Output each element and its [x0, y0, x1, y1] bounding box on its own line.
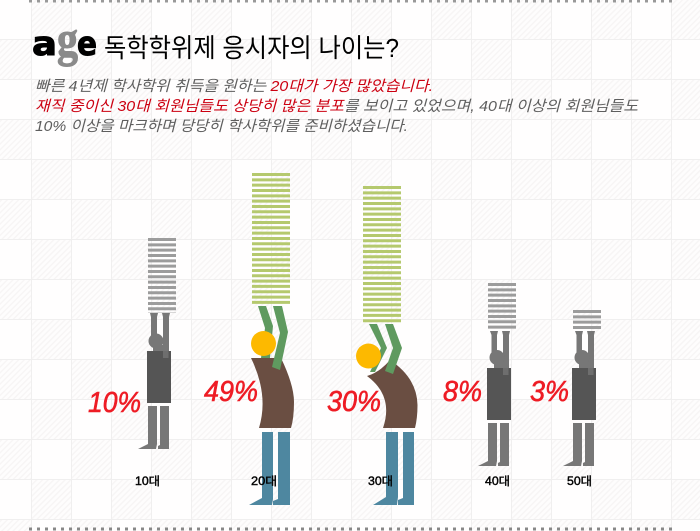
legs: [138, 406, 169, 449]
age labels: 20대: [251, 475, 277, 488]
age labels: [135, 475, 592, 488]
arm front: [385, 324, 402, 374]
body: [147, 351, 171, 403]
figure: 10대: [138, 238, 171, 449]
percentages: 3%: [530, 376, 569, 408]
age labels: 50대: [567, 475, 592, 488]
description text: 재직 중이신 30대 회원님들도 상당히 많은 분포 를 보이고 있었으며, 40대 이상의 회원님들도: [35, 98, 639, 115]
arm front: [272, 306, 288, 370]
head: [251, 331, 276, 356]
book stack: [148, 238, 176, 313]
percentages: 8%: [443, 376, 482, 408]
percentages: [88, 376, 569, 419]
arm back: [369, 324, 387, 372]
age labels: 40대: [485, 475, 510, 488]
description text: [35, 78, 639, 135]
torso: [367, 360, 418, 428]
logo: age: e: [77, 24, 97, 63]
book stack: [573, 310, 601, 331]
arms and head: [148, 313, 170, 352]
legs: [373, 432, 414, 505]
arm back: [258, 306, 273, 358]
logo: age: a: [32, 24, 57, 63]
age labels: 10대: [135, 475, 160, 488]
legs: [478, 423, 509, 466]
torso: [251, 358, 294, 428]
logo: age: g: [57, 11, 78, 67]
body: [572, 368, 596, 420]
body: [487, 368, 511, 420]
title: 독학학위제 응시자의 나이는?: [104, 33, 399, 63]
percentages: 10%: [88, 387, 141, 419]
description text: 빠른 4년제 학사학위 취득을 원하는 20대가 가장 많았습니다.: [35, 78, 433, 95]
figure: 20대: [249, 173, 294, 505]
figure: 50대: [563, 310, 596, 466]
book stack: [488, 283, 516, 331]
percentages: 49%: [204, 376, 258, 408]
head: [356, 344, 381, 368]
percentages: 30%: [327, 386, 381, 418]
legs: [563, 423, 594, 466]
arms and head: [574, 331, 595, 369]
age labels: 30대: [368, 475, 393, 488]
logo: age: [32, 11, 97, 67]
book stack: [363, 186, 401, 324]
figure: 40대: [478, 283, 511, 466]
arms and head: [490, 331, 510, 369]
legs: [249, 432, 290, 505]
figure: 30대: [356, 186, 418, 505]
book stack: [252, 173, 290, 306]
description text: 10% 이상을 마크하며 당당히 학사학위를 준비하셨습니다.: [35, 118, 408, 135]
